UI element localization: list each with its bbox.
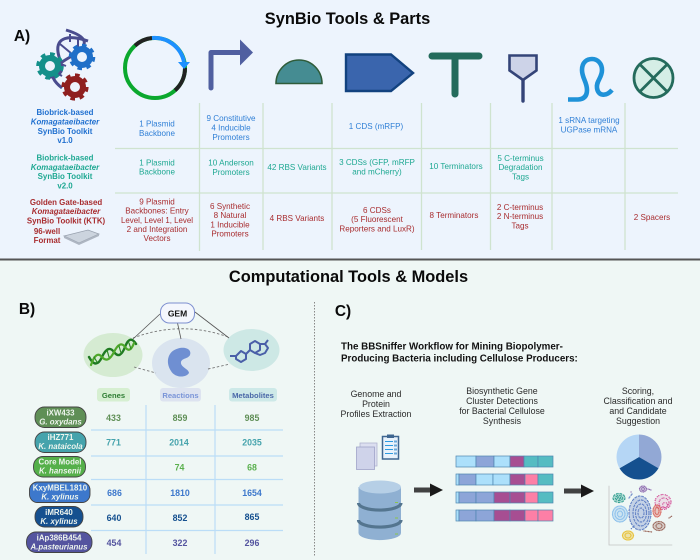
- row label: [27, 198, 106, 245]
- icon: DNA strand: [89, 340, 136, 365]
- GEM box: [160, 303, 194, 323]
- row: Biobrick v2.0: 3 CDSs (GFP, mRFP: [339, 158, 415, 167]
- model row: KxyMBEL1810: [30, 482, 262, 502]
- row label: Komagataeibacter: [31, 118, 100, 126]
- model row: iHZ771: 771: [106, 438, 121, 448]
- row label: [31, 154, 100, 190]
- row label: v2.0: [57, 182, 73, 190]
- model row: iHZ771: [35, 432, 262, 452]
- row: Biobrick v1.0: 1 sRNA targeting: [558, 116, 620, 125]
- step label: genome extraction: Profiles Extraction: [341, 409, 412, 419]
- model row: iHZ771: 2014: [169, 438, 189, 448]
- row: Golden Gate KTK: 2 and Integration: [127, 225, 187, 234]
- row label: Komagataeibacter: [31, 163, 100, 172]
- model row: Core Model: [34, 456, 257, 477]
- row label: SynBio Toolkit: [38, 172, 93, 181]
- model row: Core Model: 74: [175, 462, 184, 472]
- model row: iXW433: [35, 407, 259, 428]
- step label: scoring: Classification and: [604, 396, 673, 406]
- row: Golden Gate KTK: Backbones: Entry: [125, 206, 190, 216]
- model row: iXW433: G. oxydans: [39, 418, 82, 426]
- panel label A: A): [14, 28, 30, 45]
- model row: iMR640: 852: [173, 513, 187, 523]
- model row: iAp386B454: A.pasteurianus: [29, 542, 88, 552]
- row label: Biobrick-based: [36, 108, 94, 117]
- model row: iAp386B454: 322: [173, 538, 187, 548]
- model row: iAp386B454: 454: [107, 538, 121, 548]
- model row: iHZ771: K. nataicola: [38, 442, 83, 451]
- row: Golden Gate KTK: 6 Synthetic: [210, 202, 250, 211]
- icon: degradation tag: [510, 56, 536, 101]
- icon: promoter arrow: [211, 40, 253, 88]
- table grid: [115, 103, 678, 251]
- row: Golden Gate KTK: 2 N-terminus: [497, 212, 543, 221]
- model row: iMR640: [35, 506, 259, 527]
- model row: iXW433: 859: [173, 413, 187, 423]
- row: Golden Gate KTK: [27, 198, 670, 245]
- workflow heading: Producing Bacteria including Cellulose Producers:: [341, 354, 578, 364]
- gene bar 4: [456, 510, 553, 521]
- step label: gene cluster detection: for Bacterial Cellulose: [459, 406, 545, 416]
- column header: Metabolites: Metabolites: [232, 391, 274, 400]
- model row: iXW433: 433: [106, 413, 121, 423]
- model row: iMR640: 640: [107, 513, 121, 523]
- row label: Format: [34, 236, 61, 245]
- step label: gene cluster detection: Biosynthetic Gene: [466, 386, 538, 396]
- row: Biobrick v1.0: 9 Constitutive: [206, 114, 256, 123]
- icon: CDS pentagon: [346, 54, 413, 91]
- row: Biobrick v2.0: 1 Plasmid: [139, 158, 175, 168]
- row: Biobrick v2.0: Backbone: [139, 168, 175, 176]
- workflow heading: [341, 342, 578, 364]
- panel label C: C): [335, 303, 351, 320]
- row label: SynBio Toolkit (KTK): [27, 216, 106, 226]
- model row: iHZ771: 2035: [242, 438, 262, 448]
- model row: KxyMBEL1810: 686: [107, 488, 122, 498]
- step label: genome extraction: Genome and: [351, 389, 402, 399]
- model row: iHZ771: iHZ771: [48, 433, 74, 442]
- icon: molecule: [230, 340, 268, 362]
- row: Golden Gate KTK: Promoters: [211, 230, 249, 238]
- row: Golden Gate KTK: 8 Terminators: [430, 211, 478, 220]
- icon: sRNA: [568, 59, 612, 100]
- row: Golden Gate KTK: 2 C-terminus: [497, 203, 543, 212]
- model row: KxyMBEL1810: KxyMBEL1810: [33, 484, 88, 492]
- icon: plasmid: [125, 38, 190, 98]
- model row: KxyMBEL1810: 1654: [242, 488, 262, 498]
- icon: terminator: [432, 56, 479, 94]
- row: Biobrick v1.0: 1 Plasmid: [139, 120, 175, 128]
- row: Golden Gate KTK: 9 Plasmid: [139, 198, 175, 206]
- model row: iXW433: iXW433: [46, 408, 75, 418]
- row label: Golden Gate-based: [30, 198, 102, 207]
- row: Golden Gate KTK: (5 Fluorescent: [351, 215, 404, 224]
- GEM box: GEM: [168, 308, 187, 318]
- column header: Genes: Genes: [102, 391, 125, 400]
- pie chart: [617, 434, 661, 479]
- row label: Komagataeibacter: [32, 207, 101, 216]
- model row: iMR640: iMR640: [45, 508, 73, 517]
- step label: gene cluster detection: Cluster Detections: [466, 396, 539, 406]
- step label: genome extraction: Protein: [362, 399, 390, 409]
- column header: Reactions: Reactions: [162, 391, 199, 400]
- row: Biobrick v2.0: Promoters: [212, 168, 250, 177]
- icon: RBS half circle: [276, 60, 322, 84]
- gene bar 3: [456, 492, 553, 503]
- model row: iAp386B454: 296: [245, 538, 259, 548]
- row: Biobrick v1.0: UGPase mRNA: [561, 126, 618, 134]
- icon: documents and clipboard: [356, 434, 398, 470]
- gene bar 2: [456, 474, 553, 485]
- step label: genome extraction: [341, 389, 412, 419]
- step label: gene cluster detection: Synthesis: [483, 416, 522, 426]
- row: Golden Gate KTK: 1 Inducible: [210, 220, 250, 230]
- row: Biobrick v1.0: Promoters: [212, 133, 250, 142]
- model row: iAp386B454: [26, 532, 259, 552]
- row: Biobrick v2.0: Tags: [512, 172, 529, 182]
- row label: v1.0: [57, 136, 73, 145]
- row: Biobrick v2.0: and mCherry): [352, 168, 402, 176]
- step label: scoring: Scoring,: [622, 386, 654, 396]
- row label: SynBio Toolkit: [38, 127, 93, 136]
- column header: Metabolites: [229, 388, 277, 402]
- model row: Core Model: 68: [247, 462, 257, 472]
- model row: iXW433: 985: [245, 413, 259, 423]
- model row: KxyMBEL1810: K. xylinus: [41, 492, 79, 502]
- model row: Core Model: K. hansenii: [39, 466, 82, 476]
- row: Golden Gate KTK: 6 CDSs: [363, 206, 391, 215]
- GEM network diagram: [84, 303, 280, 388]
- row: Biobrick v1.0: 1 CDS (mRFP): [349, 122, 404, 131]
- row: Biobrick v2.0: 10 Terminators: [429, 162, 483, 171]
- row label: Biobrick-based: [36, 154, 94, 162]
- row: Biobrick v2.0: 5 C-terminus: [497, 154, 544, 163]
- row: Biobrick v2.0: 10 Anderson: [208, 158, 254, 168]
- row: Golden Gate KTK: 8 Natural: [214, 211, 247, 220]
- step label: scoring: [604, 386, 673, 426]
- model row: iMR640: K. xylinus: [40, 517, 78, 526]
- title: SynBio Tools & Parts: SynBio Tools & Parts: [265, 10, 430, 28]
- panel C: BBSniffer workflow: [335, 303, 673, 545]
- icon: 96-well plate: [64, 230, 99, 245]
- row: Golden Gate KTK: Vectors: [144, 234, 170, 243]
- icon: database: [358, 480, 401, 540]
- model row: iAp386B454: iAp386B454: [37, 534, 82, 542]
- row: Biobrick v1.0: Backbone: [139, 129, 175, 138]
- row: Biobrick v1.0: 4 Inducible: [211, 124, 251, 132]
- row: Biobrick v2.0: [31, 154, 544, 190]
- row label: [31, 108, 100, 145]
- panel B: genome-scale models: [19, 301, 283, 554]
- panel A: SynBio tools and parts: [14, 10, 678, 251]
- row: Biobrick v2.0: 42 RBS Variants: [267, 163, 327, 172]
- scatter plot: [609, 486, 672, 545]
- arrow: clusters to scoring: [564, 484, 594, 498]
- step label: scoring: Suggestion: [616, 416, 660, 426]
- model row: iMR640: 865: [245, 512, 259, 522]
- row: Golden Gate KTK: Tags: [511, 222, 529, 230]
- step label: gene cluster detection: [459, 386, 545, 426]
- model row: Core Model: Core Model: [39, 458, 81, 466]
- row: Golden Gate KTK: 4 RBS Variants: [270, 214, 324, 223]
- row: Golden Gate KTK: Level, Level 1, Level: [121, 216, 193, 225]
- row: Golden Gate KTK: 2 Spacers: [634, 213, 670, 222]
- gene cluster bars: [456, 456, 553, 521]
- arrow: database to clusters: [414, 484, 443, 496]
- panel label B: B): [19, 301, 35, 318]
- row label: 96-well: [34, 227, 60, 236]
- step label: scoring: and Candidate: [609, 406, 667, 416]
- icon: spacer circle: [634, 58, 673, 98]
- icon: DNA with gears: [38, 30, 94, 99]
- models table grid: [91, 405, 283, 554]
- column header: Genes: [97, 388, 130, 402]
- column header: Reactions: [160, 388, 201, 402]
- row: Biobrick v2.0: Degradation: [498, 163, 543, 172]
- row: Golden Gate KTK: Reporters and LuxR): [339, 224, 415, 234]
- workflow heading: The BBSniffer Workflow for Mining Biopolymer-: [341, 342, 563, 352]
- gene bar 1: [456, 456, 553, 467]
- icon: protein: [168, 348, 190, 377]
- heading: Computational Tools & Models: Computational Tools & Models: [229, 268, 468, 286]
- row: Biobrick v1.0: [31, 108, 620, 145]
- model row: KxyMBEL1810: 1810: [170, 488, 190, 498]
